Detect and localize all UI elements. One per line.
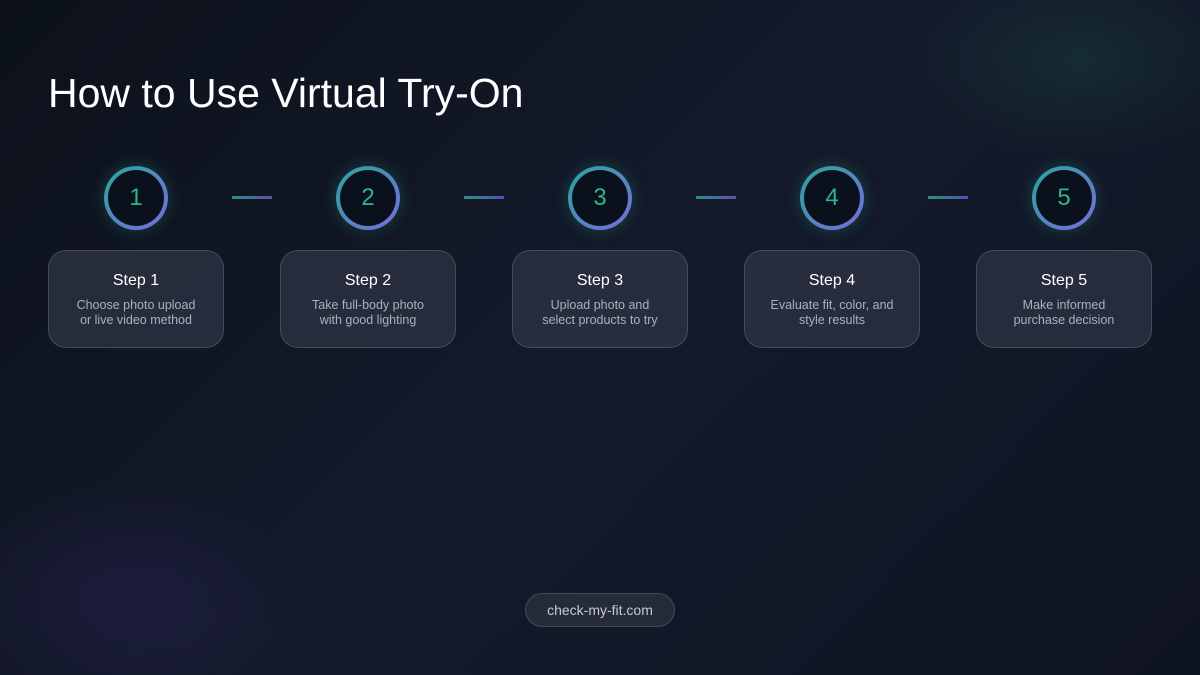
- step 2 circle: 2: [361, 184, 375, 211]
- connector arrow 1-2: [232, 196, 272, 199]
- card: step 1: [48, 250, 224, 348]
- card: step 2: Take full-body photo: [312, 298, 424, 312]
- card: step 2: with good lighting: [320, 313, 416, 327]
- connector arrow 3-4: [696, 196, 736, 199]
- card: step 1: Choose photo upload: [77, 298, 195, 312]
- step 4 circle: [800, 166, 864, 230]
- card: step 4: style results: [799, 313, 865, 327]
- step 5 circle: [1032, 166, 1096, 230]
- card: step 1: or live video method: [80, 313, 192, 327]
- card: step 3: Step 3: [577, 272, 623, 289]
- connector arrow 2-3: [464, 196, 504, 199]
- card: step 5: purchase decision: [1014, 313, 1114, 327]
- step 5 circle: 5: [1057, 184, 1071, 211]
- card: step 2: Step 2: [345, 272, 391, 289]
- card: step 5: [976, 250, 1152, 348]
- card: step 3: [512, 250, 688, 348]
- step 3 circle: [568, 166, 632, 230]
- title: How to Use Virtual Try-On: [48, 70, 523, 116]
- footer url: check-my-fit.com: [547, 602, 653, 618]
- step 3 circle: 3: [593, 184, 607, 211]
- card: step 4: Step 4: [809, 272, 855, 289]
- card: step 3: Upload photo and: [551, 298, 649, 312]
- step 2 circle: [336, 166, 400, 230]
- step 1 circle: [104, 166, 168, 230]
- card: step 4: Evaluate fit, color, and: [770, 298, 894, 312]
- step 4 circle: 4: [825, 184, 839, 211]
- footer url: [525, 593, 675, 627]
- card: step 3: select products to try: [542, 313, 658, 327]
- card: step 2: [280, 250, 456, 348]
- card: step 1: Step 1: [113, 272, 159, 289]
- card: step 5: Make informed: [1023, 298, 1105, 312]
- connector arrow 4-5: [928, 196, 968, 199]
- card: step 5: Step 5: [1041, 272, 1087, 289]
- step 1 circle: 1: [129, 184, 143, 211]
- card: step 4: [744, 250, 920, 348]
